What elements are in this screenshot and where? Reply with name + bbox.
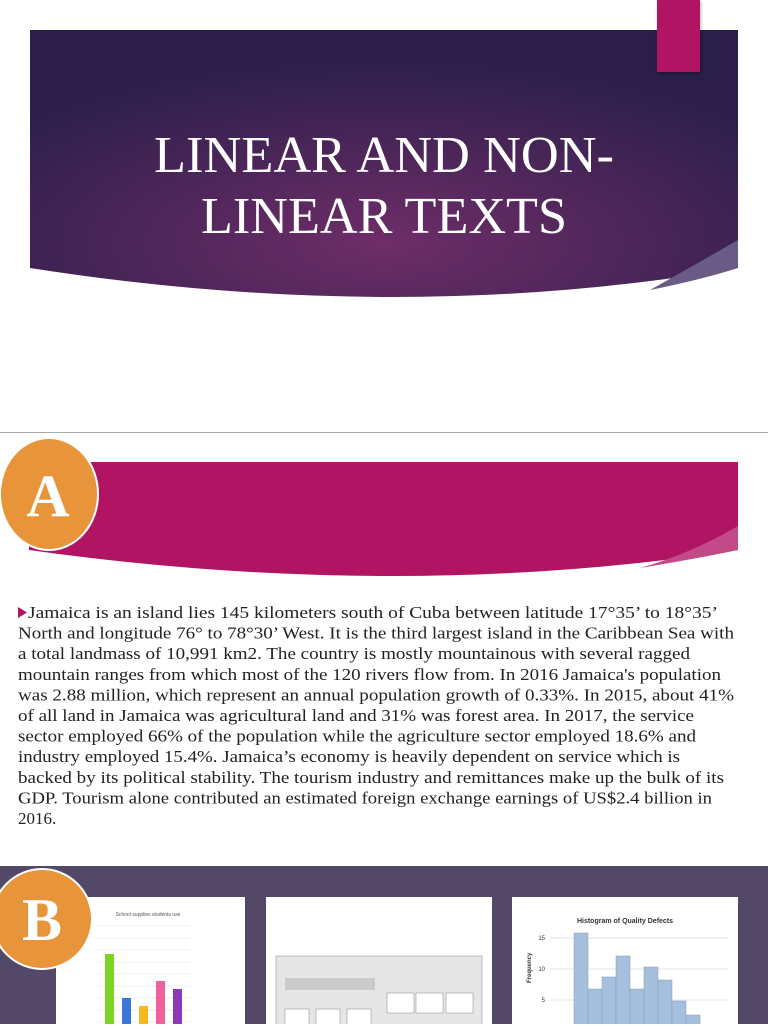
card: histogram: 15 [538, 936, 546, 942]
paragraph A: industry employed 15.4%. Jamaica’s economy is heavily dependent on service which is [18, 747, 680, 766]
paragraph A: a total landmass of 10,991 km2. The country is mostly mountainous with several ragged [18, 644, 691, 663]
paragraph A: North and longitude 76° to 78°30’ West. It is the third largest island in the Caribbean Sea with [18, 624, 735, 643]
card: bar chart [56, 897, 245, 1029]
section A header band [1, 439, 738, 576]
paragraph A: GDP. Tourism alone contributed an estimated foreign exchange earnings of US$2.4 billion in [18, 788, 713, 807]
badge A: A [26, 463, 70, 529]
card: histogram: 5 [542, 998, 546, 1004]
paragraph A: was 2.88 million, which represent an annual population growth of 0.33%. In 2015, about 41% [18, 685, 734, 704]
paragraph A: mountain ranges from which most of the 120 rivers flow from. In 2016 Jamaica's population [18, 665, 722, 684]
card: bar chart: School supplies students use [116, 912, 181, 918]
title banner: LINEAR AND NON- [154, 127, 614, 184]
paragraph A: sector employed 66% of the population while the agriculture sector employed 18.6% and [18, 727, 697, 746]
badge B: B [22, 887, 62, 953]
divider line [0, 432, 768, 433]
card: histogram: 10 [538, 967, 546, 973]
paragraph A: Jamaica is an island lies 145 kilometers south of Cuba between latitude 17°35’ to 18°35’ [28, 603, 718, 622]
paragraph A: 2016. [18, 809, 56, 828]
paragraph A [18, 603, 735, 828]
section B panel [0, 866, 768, 1024]
title banner [30, 30, 738, 297]
card: histogram [512, 897, 738, 1029]
card: histogram: Histogram of Quality Defects [577, 918, 673, 925]
paragraph A: backed by its political stability. The tourism industry and remittances make up the bulk of its [18, 768, 724, 787]
title banner: LINEAR TEXTS [201, 188, 567, 245]
badge A [0, 438, 98, 550]
card: graphic organizer [266, 897, 492, 1029]
card: histogram: Frequency [527, 952, 533, 983]
paragraph A: of all land in Jamaica was agricultural land and 31% was forest area. In 2017, the service [18, 706, 694, 725]
pink tab [657, 0, 700, 72]
badge B [0, 869, 92, 969]
